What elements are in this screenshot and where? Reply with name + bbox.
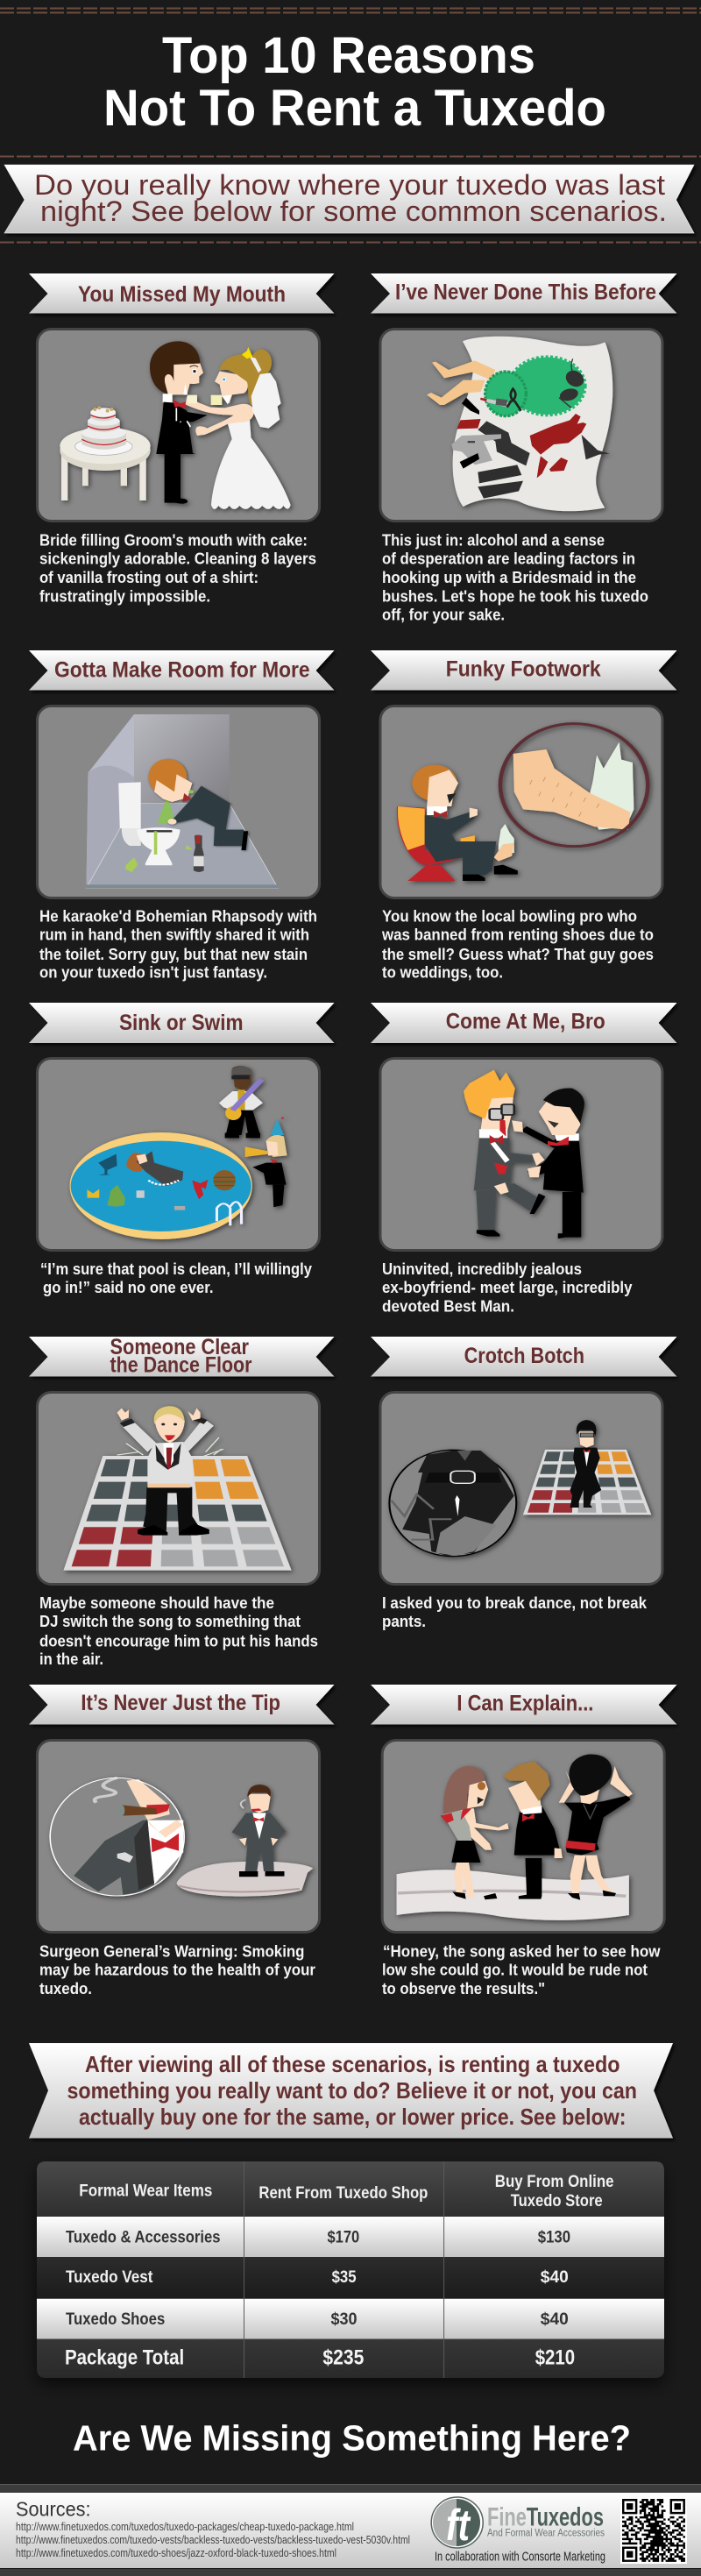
logo: Fine Tuxedos: FineTuxedos: [487, 2503, 604, 2532]
caption: sickeningly adorable. Cleaning 8 layers: [39, 550, 316, 568]
caption: [40, 1260, 312, 1296]
caption: DJ switch the song to something that: [39, 1613, 301, 1630]
table header: [79, 2173, 614, 2211]
row: tuxedo vest: [66, 2268, 569, 2287]
illustration frame: [380, 1059, 662, 1250]
illustration frame: [37, 1741, 319, 1932]
caption: [382, 1942, 661, 1998]
illustration: man on dance floor with split jacket: [63, 1406, 292, 1571]
panel: Gotta Make Room for More: [29, 650, 335, 982]
row: tuxedo and accessories: $130: [538, 2228, 570, 2246]
caption: rum in hand, then swiftly shared it with: [39, 926, 309, 944]
caption: Surgeon General’s Warning: Smoking: [39, 1942, 305, 1960]
heading ribbon: [371, 273, 676, 314]
illustration frame: [382, 1741, 664, 1932]
closing heading: Are We Missing Something Here?: [73, 2418, 631, 2459]
row: tuxedo vest: Tuxedo Vest: [66, 2268, 153, 2287]
illustration frame: [380, 706, 662, 898]
row: tuxedo shoes: $40: [541, 2310, 569, 2329]
comparison table: [37, 2161, 664, 2378]
caption: off, for your sake.: [382, 607, 505, 624]
illustration frame: [37, 330, 319, 521]
panel: It's Never Just the Tip: [29, 1685, 335, 1998]
logo: Fine Tuxedos: [431, 2497, 605, 2565]
subtitle banner: Do you really know where your tuxedo was last: [34, 169, 665, 201]
panel: Funky Footwork: [371, 650, 676, 982]
sources: Sources:: [16, 2498, 91, 2521]
row: tuxedo and accessories: $170: [328, 2228, 359, 2246]
illustration frame: [37, 1059, 319, 1250]
caption: hooking up with a Bridesmaid in the: [382, 569, 636, 586]
panel: Sink or Swim: [29, 1003, 335, 1296]
logo: Fine Tuxedos: ft: [446, 2501, 471, 2550]
row: package total: [65, 2345, 575, 2369]
caption: tuxedo.: [39, 1980, 92, 1998]
caption: low she could go. It would be rude not: [382, 1961, 648, 1978]
heading ribbon: I’ve Never Done This Before: [395, 280, 656, 305]
comparison banner: After viewing all of these scenarios, is renting a tuxedo: [85, 2051, 620, 2077]
caption: [39, 1594, 318, 1668]
heading ribbon: Someone Clear: [110, 1335, 249, 1359]
caption: [382, 532, 648, 624]
caption: on your tuxedo isn't just fantasy.: [39, 964, 267, 982]
subtitle banner: [4, 165, 694, 233]
heading ribbon: Crotch Botch: [464, 1344, 584, 1368]
heading ribbon: Sink or Swim: [119, 1011, 244, 1035]
row: tuxedo vest: $35: [332, 2268, 357, 2287]
comparison banner: something you really want to do? Believe it or not, you can: [67, 2077, 637, 2104]
row: package total: $210: [535, 2345, 575, 2369]
heading ribbon: [29, 1003, 335, 1043]
title: Not To Rent a Tuxedo: [103, 80, 606, 137]
illustration: pool party: [70, 1066, 287, 1239]
panel: I Can Explain: [371, 1685, 676, 1998]
caption: go in!” said no one ever.: [43, 1279, 214, 1296]
heading ribbon: the Dance Floor: [110, 1353, 252, 1378]
logo: Fine Tuxedos: And Formal Wear Accessories: [487, 2529, 605, 2539]
comparison banner: [29, 2043, 673, 2139]
logo: Fine Tuxedos: In collaboration with Consorte Marketing: [435, 2550, 605, 2565]
illustration: two men fighting: [464, 1070, 584, 1238]
heading ribbon: Gotta Make Room for More: [54, 657, 310, 682]
table header: Buy From Online: [495, 2173, 613, 2191]
row: tuxedo shoes: [66, 2310, 569, 2329]
panel: You Missed My Mouth: [29, 273, 335, 606]
caption: doesn't encourage him to put his hands: [39, 1632, 318, 1650]
caption: ex-boyfriend- meet large, incredibly: [382, 1279, 633, 1296]
heading ribbon: Funky Footwork: [446, 657, 601, 682]
caption: You know the local bowling pro who: [382, 908, 637, 926]
heading ribbon: [371, 650, 676, 691]
caption: bushes. Let's hope he took his tuxedo: [382, 588, 648, 606]
illustration: man with smelly foot: [397, 724, 648, 881]
table header: Tuxedo Store: [511, 2192, 603, 2211]
caption: Maybe someone should have the: [39, 1594, 274, 1612]
heading ribbon: [371, 1003, 676, 1043]
caption: Bride filling Groom's mouth with cake:: [39, 532, 308, 550]
panel: I've Never Done This Before: [371, 273, 676, 624]
caption: the smell? Guess what? That guy goes: [382, 946, 654, 963]
caption: pants.: [382, 1613, 426, 1630]
caption: I asked you to break dance, not break: [382, 1594, 648, 1612]
panel: Crotch Botch: [371, 1337, 676, 1630]
illustration frame: [37, 706, 319, 898]
title: Top 10 Reasons: [162, 27, 535, 84]
sources: http://www.finetuxedos.com/tuxedo-shoes/jazz-oxford-black-tuxedo-shoes.html: [16, 2546, 336, 2559]
caption: to weddings, too.: [382, 964, 503, 982]
row: package total: Package Total: [65, 2345, 184, 2369]
heading ribbon: Come At Me, Bro: [446, 1010, 605, 1034]
caption: [39, 908, 317, 982]
caption: may be hazardous to the health of your: [39, 1961, 315, 1978]
panel: Come At Me, Bro: [371, 1003, 676, 1316]
illustration: ripped pants close-up and dancer: [389, 1420, 651, 1557]
row: tuxedo shoes: $30: [331, 2310, 358, 2329]
row: tuxedo vest: $40: [541, 2268, 569, 2287]
panel: Someone Clear the Dance Floor: [29, 1335, 335, 1668]
illustration frame: [37, 1392, 319, 1585]
caption: of desperation are leading factors in: [382, 550, 635, 568]
caption: [382, 1260, 633, 1316]
caption: frustratingly impossible.: [39, 588, 210, 606]
caption: He karaoke'd Bohemian Rhapsody with: [39, 908, 317, 926]
heading ribbon: [29, 650, 335, 691]
caption: the toilet. Sorry guy, but that new stain: [39, 946, 308, 963]
heading ribbon: [371, 1337, 676, 1376]
heading ribbon: [371, 1685, 676, 1725]
icon: QR code: [620, 2497, 687, 2564]
caption: was banned from renting shoes due to: [381, 926, 654, 944]
caption: [381, 908, 654, 982]
caption: Uninvited, incredibly jealous: [382, 1260, 582, 1278]
illustration: clothes scattered in the bushes: [427, 337, 612, 511]
row: tuxedo shoes: Tuxedo Shoes: [66, 2310, 165, 2329]
caption: devoted Best Man.: [382, 1298, 514, 1316]
sources: [16, 2498, 410, 2559]
title: [103, 27, 606, 137]
caption: in the air.: [39, 1650, 103, 1668]
footer: [0, 2484, 701, 2576]
comparison banner: actually buy one for the same, or lower price. See below:: [79, 2104, 626, 2130]
caption: of vanilla frosting out of a shirt:: [39, 569, 258, 586]
table header: Rent From Tuxedo Shop: [258, 2184, 428, 2203]
illustration: couple and dancer on stage: [397, 1755, 633, 1920]
row: package total: $235: [322, 2345, 364, 2369]
illustration frame: [380, 1392, 662, 1585]
sources: http://www.finetuxedos.com/tuxedos/tuxedo-packages/cheap-tuxedo-package.html: [16, 2520, 354, 2533]
illustration frame: [380, 330, 662, 521]
sources: http://www.finetuxedos.com/tuxedo-vests/backless-tuxedo-vests/backless-tuxedo-vest-5030v.html: [16, 2533, 410, 2546]
heading ribbon: I Can Explain...: [457, 1692, 593, 1716]
table header: Formal Wear Items: [79, 2182, 212, 2201]
caption: [39, 1942, 315, 1998]
illustration: bride and groom with cake: [60, 341, 291, 509]
caption: to observe the results.": [382, 1980, 545, 1998]
caption: [382, 1594, 648, 1630]
caption: “Honey, the song asked her to see how: [383, 1942, 661, 1960]
illustration: cigar burn on tuxedo: [50, 1778, 313, 1897]
caption: “I’m sure that pool is clean, I’ll willingly: [40, 1260, 312, 1278]
row: tuxedo and accessories: Tuxedo & Accessories: [66, 2228, 221, 2246]
heading ribbon: You Missed My Mouth: [78, 282, 286, 307]
illustration: man sick over a toilet: [86, 714, 278, 888]
subtitle banner: night? See below for some common scenarios.: [40, 195, 667, 227]
row: tuxedo and accessories: [66, 2228, 570, 2246]
heading ribbon: It’s Never Just the Tip: [81, 1691, 280, 1715]
heading ribbon: [29, 1685, 335, 1725]
heading ribbon: [29, 1335, 335, 1378]
heading ribbon: [29, 273, 335, 314]
caption: This just in: alcohol and a sense: [382, 532, 605, 550]
caption: [39, 532, 316, 606]
